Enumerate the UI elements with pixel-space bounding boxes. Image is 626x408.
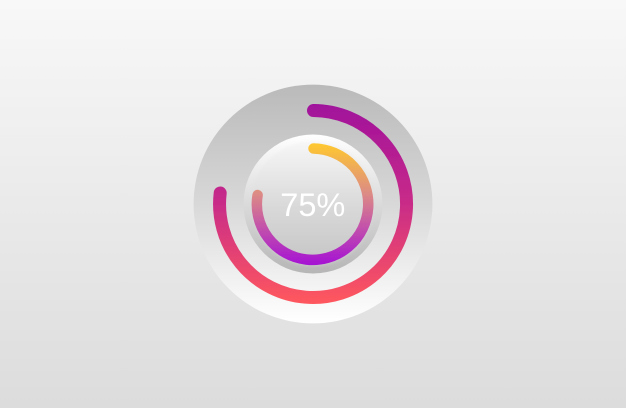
- outer progress arc: [220, 110, 407, 297]
- inner progress arc: [257, 148, 368, 260]
- inner disk: [244, 134, 382, 274]
- percentage label: 75%: [280, 187, 345, 223]
- outer disk: [194, 85, 432, 323]
